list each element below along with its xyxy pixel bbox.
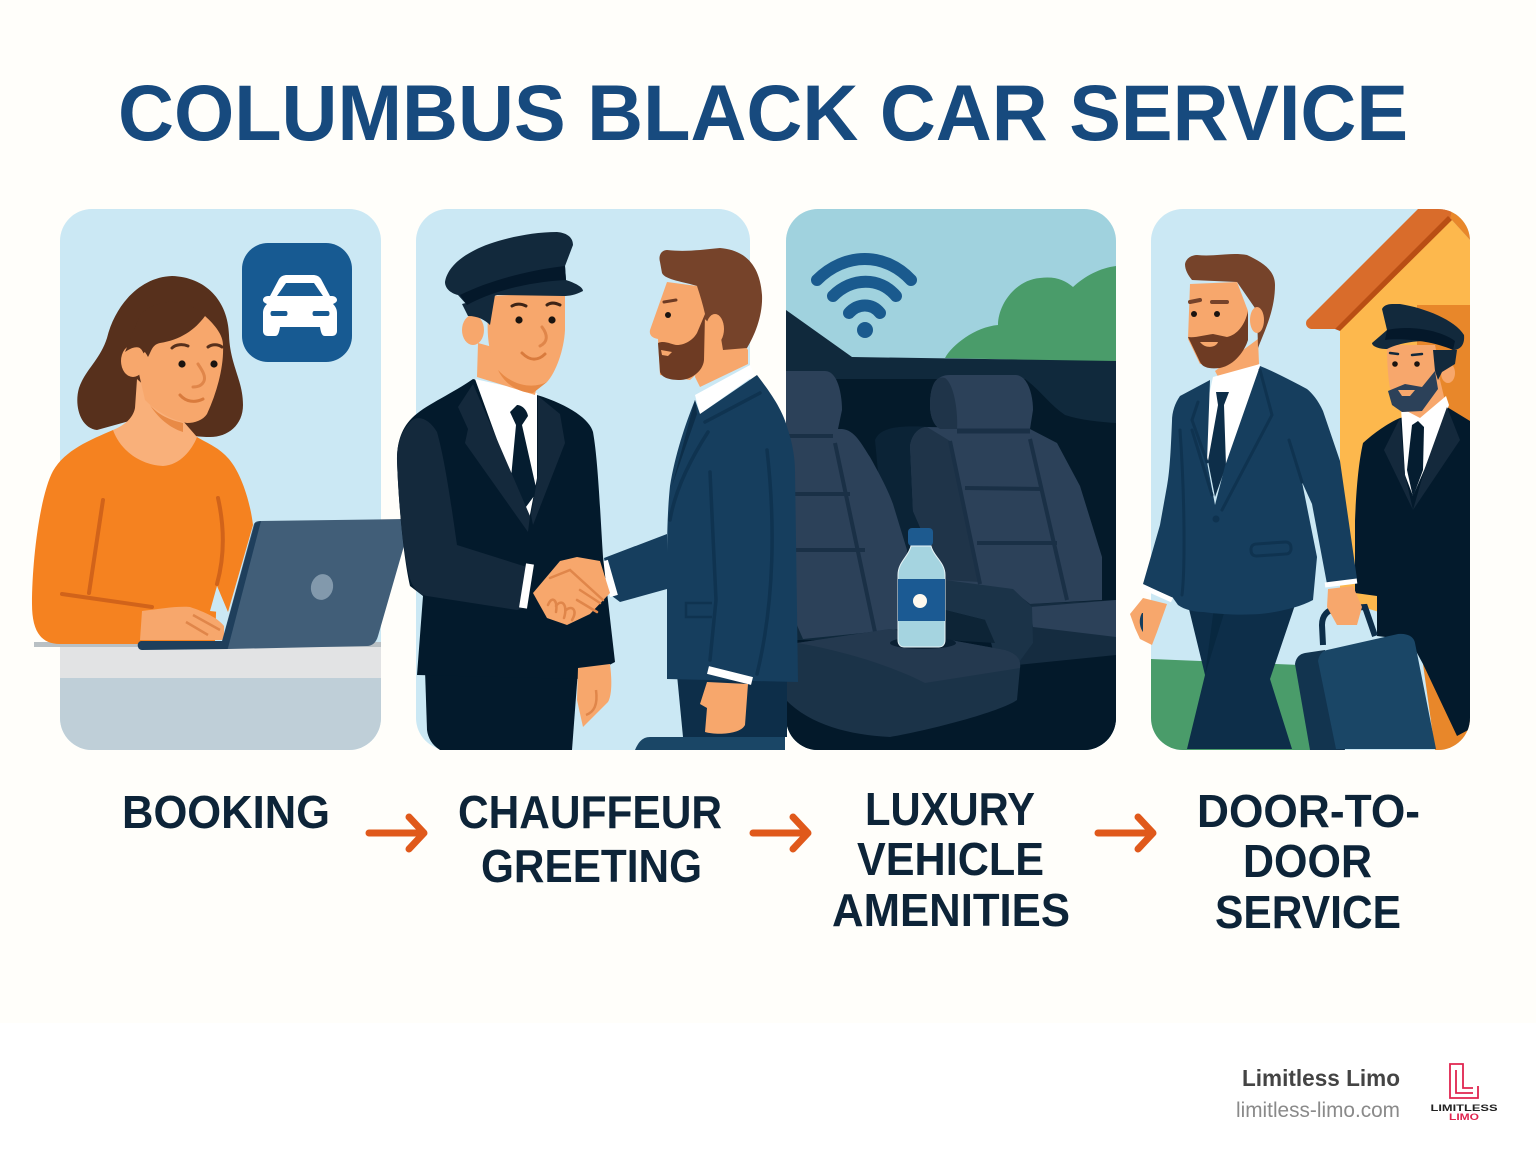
suitcase [1295,634,1436,750]
hair [462,295,495,325]
figure: chauffeur [397,232,615,750]
neck [113,379,197,466]
face [137,316,223,423]
collar [695,365,755,414]
arrow: amenities to door service [1098,817,1153,849]
logo: Limitless Limo: LIMO [1449,1112,1479,1122]
cuffs [604,561,752,681]
laptop [138,519,410,650]
trousers [1187,605,1295,749]
spare hand [577,664,611,727]
label: chauffeur greeting [458,786,722,892]
house wall [1340,218,1470,640]
hands [1130,598,1167,645]
hand [140,607,224,640]
label: chauffeur greeting: CHAUFFEUR [458,786,722,838]
rear seat left [786,371,907,639]
panel: luxury vehicle amenities [786,209,1116,750]
logo: Limitless Limo: LIMITLESS [1430,1103,1498,1113]
figure: second chauffeur [1355,304,1470,736]
facial features [512,303,560,359]
roof [1442,209,1470,240]
sweater folds [62,498,223,607]
tie [510,405,537,511]
suitcase handle [1322,607,1375,645]
face [488,292,565,387]
icon: wifi [817,259,911,338]
rear seat right [910,375,1116,665]
hair [77,276,243,437]
label: door-to-door service [1197,785,1420,938]
label: door-to-door service: DOOR-TO- [1197,785,1420,837]
logo: Limitless Limo [1430,1064,1498,1122]
grass [1151,659,1310,750]
floor [786,640,1116,750]
bush [945,266,1116,362]
label: booking: BOOKING [122,786,330,838]
sleeve [604,534,667,602]
label: chauffeur greeting: GREETING [481,840,702,892]
trousers [425,670,578,750]
figure: businessman [604,248,798,750]
arrow: booking to greeting [369,817,424,849]
label: luxury vehicle amenities: AMENITIES [832,884,1070,936]
label: luxury vehicle amenities [832,783,1070,936]
door [1417,305,1470,430]
hair [659,248,762,350]
label: door-to-door service: DOOR [1243,835,1372,887]
cuffs [1143,581,1357,600]
neck [695,311,748,387]
neck [1215,339,1259,386]
vehicle interior [786,310,1116,750]
beard [1188,311,1248,368]
figure: client walking [1130,254,1362,749]
footer brand text [1236,1065,1400,1122]
label: luxury vehicle amenities: LUXURY [865,783,1035,835]
jacket [1143,366,1357,615]
shirt [475,379,537,525]
panel: chauffeur greeting [397,209,798,750]
ear [462,315,484,345]
panel: booking [32,209,410,750]
label: luxury vehicle amenities: VEHICLE [857,833,1044,885]
lapels [458,384,530,532]
neck [477,343,540,395]
shirt [1205,364,1262,466]
arm [397,418,530,610]
water bottle [890,528,956,649]
trousers [677,675,787,737]
face [650,282,705,380]
handshake [533,557,610,625]
jacket [667,375,798,682]
hand [700,682,748,734]
hair [1185,254,1275,348]
figure: woman at laptop [32,276,253,644]
label: door-to-door service: SERVICE [1215,886,1401,938]
briefcase [635,737,785,750]
panel: door-to-door service [1130,209,1470,750]
center console [946,580,1032,649]
footer brand text: limitless-limo.com [1236,1099,1400,1122]
title: COLUMBUS BLACK CAR SERVICE [118,68,1408,157]
face [1188,282,1248,364]
seat cushion [787,643,1020,737]
arrow: greeting to amenities [753,817,808,849]
tie [1208,392,1229,497]
cap [445,232,583,305]
jacket [397,379,615,679]
icon: car badge [242,243,352,362]
fringe [125,302,205,357]
beard [658,314,705,380]
sweater [32,430,253,644]
ear [121,345,145,377]
footer brand text: Limitless Limo [1242,1065,1400,1091]
step labels [122,783,1420,938]
facial features [172,345,222,401]
